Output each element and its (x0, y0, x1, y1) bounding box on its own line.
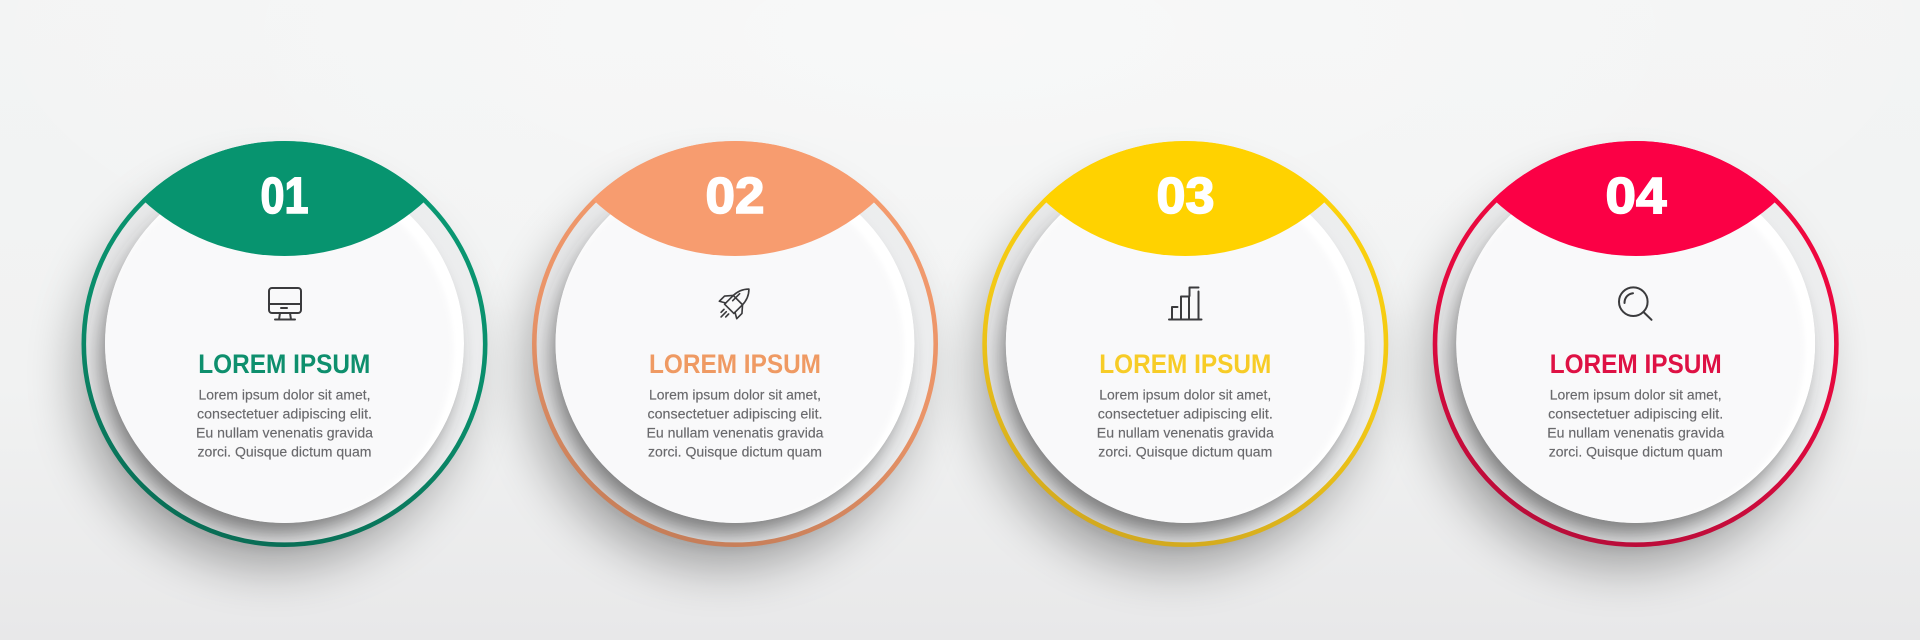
body text: consectetuer adipiscing elit. (648, 405, 822, 421)
body text (646, 386, 824, 460)
ring (84, 143, 485, 545)
body text: consectetuer adipiscing elit. (1548, 405, 1723, 421)
panel: step 04 (1429, 141, 1836, 566)
body text: Eu nullam venenatis gravida (646, 424, 824, 440)
body text: zorci. Quisque dictum quam (198, 444, 372, 460)
banner (1493, 141, 1778, 256)
body text: consectetuer adipiscing elit. (197, 405, 372, 421)
heading: LOREM IPSUM (198, 349, 370, 379)
number: 02 (706, 167, 764, 224)
body text: zorci. Quisque dictum quam (1098, 444, 1272, 460)
body text (196, 386, 373, 460)
number: 04 (1606, 167, 1667, 224)
icon: rocket (712, 280, 758, 326)
disk shadow (1453, 182, 1805, 534)
ground shadow (979, 178, 1367, 566)
ring well (535, 144, 935, 544)
ground shadow (1429, 178, 1817, 566)
body text: Lorem ipsum dolor sit amet, (198, 386, 370, 402)
body text: Eu nullam venenatis gravida (196, 424, 373, 440)
heading: LOREM IPSUM (649, 349, 821, 379)
disk shadow (102, 182, 454, 534)
banner (142, 141, 427, 256)
heading: LOREM IPSUM (1550, 349, 1722, 379)
icon: magnifier (1619, 287, 1652, 320)
panel: step 02 (528, 141, 936, 566)
disk (105, 214, 464, 523)
icon: monitor (269, 288, 301, 320)
banner (1043, 141, 1328, 256)
disk (1006, 214, 1365, 523)
ground shadow (78, 178, 466, 566)
banner (593, 141, 877, 256)
body text: consectetuer adipiscing elit. (1098, 405, 1273, 421)
ring well (1436, 144, 1836, 544)
disk (556, 214, 914, 523)
panel: step 03 (979, 141, 1386, 566)
icon: bar chart (1169, 288, 1202, 320)
body text: Eu nullam venenatis gravida (1547, 424, 1724, 440)
disk (1456, 214, 1815, 523)
body text: Lorem ipsum dolor sit amet, (649, 386, 821, 402)
heading: LOREM IPSUM (1099, 349, 1271, 379)
body text (1547, 386, 1724, 460)
panel: step 01 (78, 141, 485, 566)
ground shadow (528, 178, 916, 566)
disk shadow (1003, 182, 1355, 534)
number: 01 (260, 167, 308, 224)
ring (534, 143, 936, 545)
body text: Eu nullam venenatis gravida (1097, 424, 1274, 440)
number: 03 (1156, 167, 1214, 224)
disk shadow (552, 182, 904, 534)
ring well (985, 144, 1385, 544)
body text: Lorem ipsum dolor sit amet, (1550, 386, 1722, 402)
ring (985, 143, 1386, 545)
body text: zorci. Quisque dictum quam (648, 444, 822, 460)
body text: zorci. Quisque dictum quam (1549, 444, 1723, 460)
ring (1435, 143, 1836, 545)
body text: Lorem ipsum dolor sit amet, (1099, 386, 1271, 402)
body text (1097, 386, 1274, 460)
ring well (84, 144, 484, 544)
